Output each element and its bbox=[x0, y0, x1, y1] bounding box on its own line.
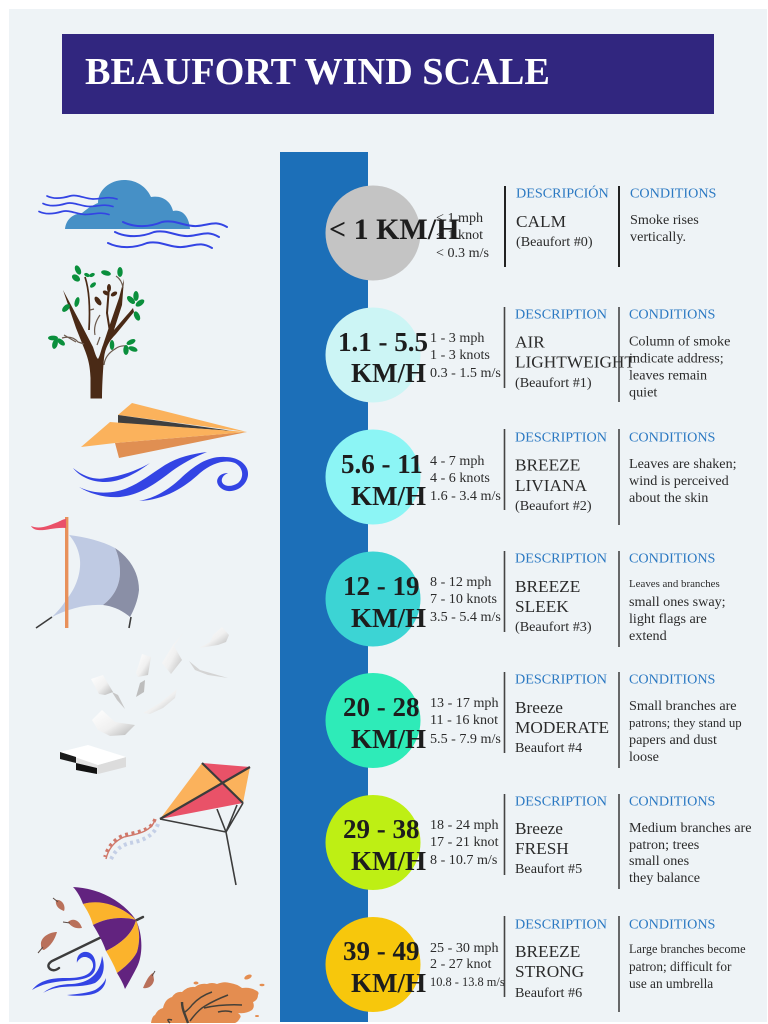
row 4: breeze moderate: patrons; they stand up bbox=[629, 716, 742, 730]
row 1: air lightweight: leaves remain bbox=[629, 368, 707, 384]
row 3: breeze sleek: DESCRIPTION bbox=[515, 550, 607, 566]
row 1: air lightweight: AIR bbox=[515, 332, 545, 352]
row 5: breeze fresh: 8 - 10.7 m/s bbox=[430, 852, 497, 868]
row 1: air lightweight: 1 - 3 mph bbox=[430, 330, 484, 346]
row 0: calm: < 1 knot bbox=[436, 227, 483, 243]
row 1: air lightweight: DESCRIPTION bbox=[515, 306, 607, 322]
row 1: air lightweight: indicate address; bbox=[629, 350, 724, 366]
row 5: breeze fresh: they balance bbox=[629, 870, 700, 886]
row 4: breeze moderate: Beaufort #4 bbox=[515, 740, 582, 756]
row 3: breeze sleek: SLEEK bbox=[515, 597, 569, 616]
row 3: breeze sleek: BREEZE bbox=[515, 577, 580, 596]
row 4: breeze moderate: Breeze bbox=[515, 698, 563, 717]
row 1: air lightweight: LIGHTWEIGHT bbox=[515, 352, 635, 372]
row 5: breeze fresh: Beaufort #5 bbox=[515, 861, 582, 877]
row 0: calm: CALM bbox=[516, 212, 566, 231]
row 3: breeze sleek: Leaves and branches bbox=[629, 578, 720, 590]
icon: tree bbox=[48, 264, 146, 398]
row 4: breeze moderate: Small branches are bbox=[629, 698, 737, 714]
row 3: breeze sleek: extend bbox=[629, 628, 667, 644]
row 6: breeze strong: 10.8 - 13.8 m/s bbox=[430, 975, 505, 989]
row 0: calm: < 0.3 m/s bbox=[436, 245, 489, 261]
row 4: breeze moderate: 13 - 17 mph bbox=[430, 695, 499, 711]
row 4: breeze moderate: DESCRIPTION bbox=[515, 671, 607, 687]
row 3: breeze sleek: light flags are bbox=[629, 611, 707, 627]
row 4: breeze moderate: MODERATE bbox=[515, 718, 609, 737]
row 5: breeze fresh: FRESH bbox=[515, 839, 569, 858]
row 6: breeze strong: 25 - 30 mph bbox=[430, 940, 499, 956]
row 5: breeze fresh: Medium branches are bbox=[629, 820, 752, 836]
row 1: air lightweight bbox=[326, 306, 730, 402]
row 6: breeze strong bbox=[326, 916, 746, 1012]
row 2: breeze liviana: about the skin bbox=[629, 490, 708, 506]
row 1: air lightweight: 1.1 - 5.5 bbox=[338, 327, 428, 357]
row 2: breeze liviana: 5.6 - 11 bbox=[341, 449, 423, 479]
row 3: breeze sleek bbox=[326, 550, 726, 647]
row 1: air lightweight: Column of smoke bbox=[629, 334, 730, 350]
icon: cloud with wind bbox=[39, 180, 227, 248]
title banner: BEAUFORT WIND SCALE bbox=[85, 51, 550, 93]
row 2: breeze liviana bbox=[326, 429, 737, 525]
row 2: breeze liviana: CONDITIONS bbox=[629, 429, 715, 445]
row 6: breeze strong: 39 - 49 bbox=[343, 936, 420, 966]
row 3: breeze sleek: 3.5 - 5.4 m/s bbox=[430, 609, 501, 625]
row 2: breeze liviana: (Beaufort #2) bbox=[515, 498, 592, 514]
row 0: calm: (Beaufort #0) bbox=[516, 234, 593, 250]
row 6: breeze strong: 2 - 27 knot bbox=[430, 956, 492, 972]
row 5: breeze fresh: Breeze bbox=[515, 819, 563, 838]
row 1: air lightweight: (Beaufort #1) bbox=[515, 375, 592, 391]
vertical blue band bbox=[280, 152, 368, 1022]
icon: flying papers and stack bbox=[60, 627, 229, 774]
row 2: breeze liviana: KM/H bbox=[351, 481, 426, 511]
row 1: air lightweight: quiet bbox=[629, 384, 657, 400]
row 5: breeze fresh: patron; trees bbox=[629, 837, 699, 853]
row 6: breeze strong: patron; difficult for bbox=[629, 959, 732, 974]
title banner bbox=[62, 34, 714, 114]
row 3: breeze sleek: KM/H bbox=[351, 603, 426, 633]
icon: umbrella with leaves and wind bbox=[32, 887, 155, 996]
icon: paper plane over wind bbox=[73, 403, 248, 501]
row 4: breeze moderate: 11 - 16 knot bbox=[430, 712, 498, 728]
row 5: breeze fresh: 29 - 38 bbox=[343, 814, 420, 844]
row 4: breeze moderate: loose bbox=[629, 749, 659, 765]
row 0: calm: vertically. bbox=[630, 229, 686, 245]
row 3: breeze sleek: CONDITIONS bbox=[629, 550, 715, 566]
row 2: breeze liviana: BREEZE bbox=[515, 456, 580, 474]
row 4: breeze moderate bbox=[326, 671, 742, 768]
row 0: calm: Smoke rises bbox=[630, 212, 699, 228]
row 1: air lightweight: KM/H bbox=[351, 358, 426, 388]
row 0: calm: < 1 mph bbox=[436, 210, 483, 226]
row 6: breeze strong: STRONG bbox=[515, 962, 584, 981]
row 4: breeze moderate: 5.5 - 7.9 m/s bbox=[430, 731, 501, 747]
row 6: breeze strong: BREEZE bbox=[515, 942, 580, 961]
row 5: breeze fresh: 18 - 24 mph bbox=[430, 817, 499, 833]
row 4: breeze moderate: CONDITIONS bbox=[629, 671, 715, 687]
row 3: breeze sleek: small ones sway; bbox=[629, 594, 726, 610]
row 1: air lightweight: 0.3 - 1.5 m/s bbox=[430, 365, 501, 381]
row 5: breeze fresh: KM/H bbox=[351, 846, 426, 876]
row 2: breeze liviana: LIVIANA bbox=[515, 476, 588, 495]
row 1: air lightweight: 1 - 3 knots bbox=[430, 347, 490, 363]
row 6: breeze strong: Large branches become bbox=[629, 942, 746, 956]
row 3: breeze sleek: 7 - 10 knots bbox=[430, 591, 497, 607]
icon: kite bbox=[105, 763, 250, 885]
row 5: breeze fresh: small ones bbox=[629, 853, 689, 869]
row 6: breeze strong: use an umbrella bbox=[629, 976, 713, 991]
row 4: breeze moderate: KM/H bbox=[351, 724, 426, 754]
row 0: calm: DESCRIPCIÓN bbox=[516, 184, 609, 201]
row 6: breeze strong: DESCRIPTION bbox=[515, 916, 607, 932]
row 2: breeze liviana: wind is perceived bbox=[629, 473, 729, 489]
row 6: breeze strong: Beaufort #6 bbox=[515, 985, 582, 1001]
row 3: breeze sleek: 12 - 19 bbox=[343, 571, 420, 601]
row 5: breeze fresh: CONDITIONS bbox=[629, 793, 715, 809]
row 2: breeze liviana: Leaves are shaken; bbox=[629, 456, 737, 472]
icon: autumn tree bbox=[151, 973, 264, 1023]
row 5: breeze fresh bbox=[326, 793, 752, 890]
row 0: calm: < 1 KM/H bbox=[329, 213, 459, 246]
row 0: calm: CONDITIONS bbox=[630, 185, 716, 201]
icon: flag and sail bbox=[31, 517, 139, 628]
row 5: breeze fresh: 17 - 21 knot bbox=[430, 834, 499, 850]
row 1: air lightweight: CONDITIONS bbox=[629, 306, 715, 322]
row 0: calm bbox=[326, 184, 716, 280]
row 2: breeze liviana: DESCRIPTION bbox=[515, 429, 607, 445]
row 4: breeze moderate: papers and dust bbox=[629, 732, 717, 748]
row 5: breeze fresh: DESCRIPTION bbox=[515, 793, 607, 809]
row 6: breeze strong: KM/H bbox=[351, 968, 426, 998]
row 2: breeze liviana: 1.6 - 3.4 m/s bbox=[430, 488, 501, 504]
row 6: breeze strong: CONDITIONS bbox=[629, 916, 715, 932]
row 4: breeze moderate: 20 - 28 bbox=[343, 692, 420, 722]
row 2: breeze liviana: 4 - 7 mph bbox=[430, 453, 484, 469]
row 3: breeze sleek: 8 - 12 mph bbox=[430, 574, 491, 590]
row 2: breeze liviana: 4 - 6 knots bbox=[430, 470, 490, 486]
row 3: breeze sleek: (Beaufort #3) bbox=[515, 619, 592, 635]
